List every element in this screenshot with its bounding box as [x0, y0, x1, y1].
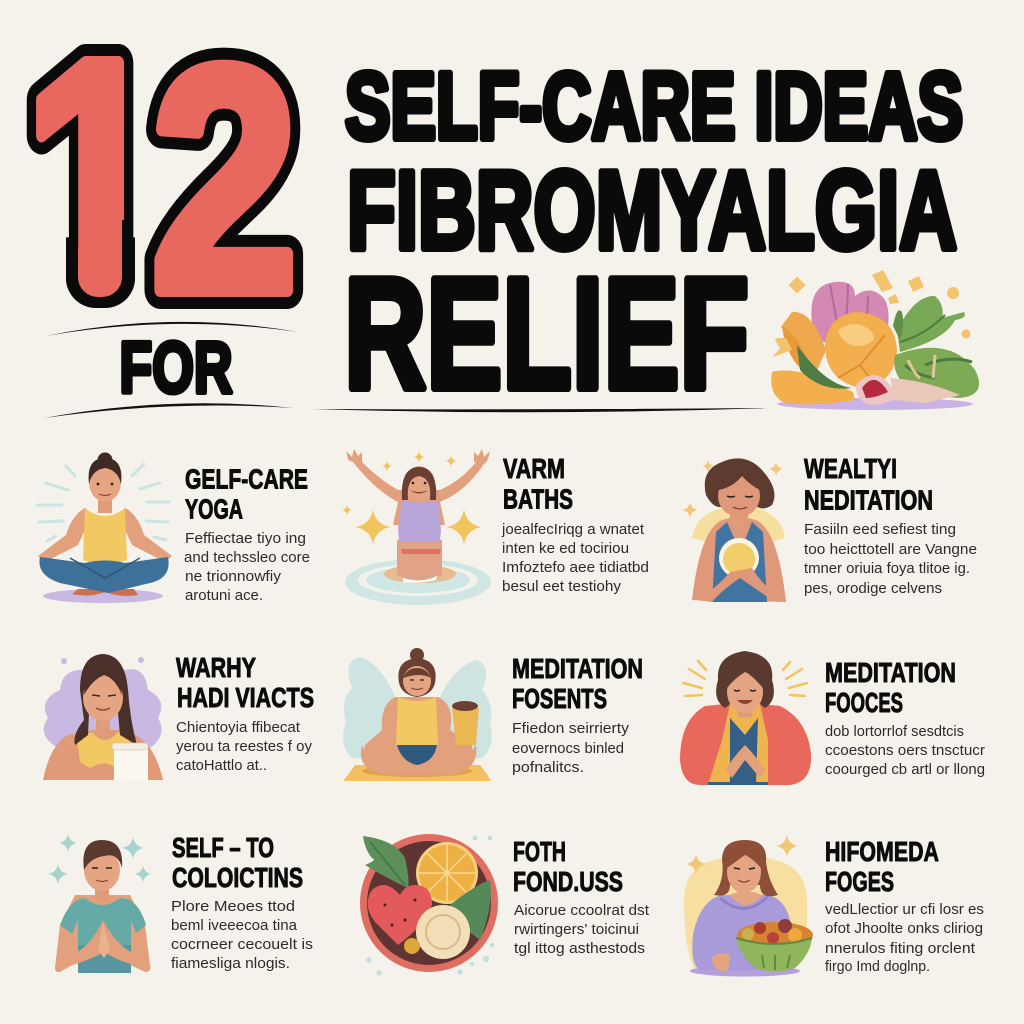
body text: Chientoyia ffibecat [176, 719, 301, 736]
heading: FOOCES [825, 687, 903, 718]
title: for: FOR [120, 328, 232, 408]
body text: Ffiedon seirrierty [512, 720, 630, 737]
big number 12: 1 [24, 0, 166, 360]
illustration: woman meditating with teal wings [343, 648, 492, 781]
panel: self-to coloictins [48, 832, 313, 973]
body text: ofot Jhoolte onks cliriog [825, 920, 983, 937]
illustration: woman with prayer hands [48, 834, 152, 973]
body text: ccoestons oers tnsctucr [825, 742, 985, 759]
illustration: food plate with heart and orange [360, 834, 498, 976]
body text: Imfoztefo aee tidiatbd [502, 559, 649, 576]
body text: Plore Meoes ttod [171, 898, 295, 915]
body text: joealfecIriqg a wnatet [501, 521, 645, 538]
panel: meditation fosents [343, 648, 643, 781]
big number 12 [26, 44, 304, 309]
body text: fiamesliga nlogis. [171, 955, 290, 972]
body text [176, 719, 312, 774]
heading [176, 652, 314, 713]
body text: Aicorue ccoolrat dst [514, 902, 650, 919]
heading [512, 653, 643, 714]
body text: rwirtingers' toicinui [514, 921, 639, 938]
body text: Fasiiln eed sefiest ting [804, 521, 956, 538]
illustration: woman holding a golden plate [682, 458, 786, 602]
body text [804, 521, 977, 597]
illustration: woman in bath water with sparkles [342, 449, 491, 605]
body text [184, 530, 310, 604]
body text: pes, orodige celvens [804, 580, 942, 597]
body text: Feffiectae tiyo ing [185, 530, 306, 547]
body text: tgl ittog asthestods [514, 940, 645, 957]
heading [825, 836, 939, 897]
heading [804, 453, 933, 516]
heading: COLOICTINS [172, 862, 303, 893]
panel: self-care yoga [37, 452, 310, 604]
body text: cocrneer cecouelt is [171, 936, 313, 953]
heading: WARHY [176, 652, 256, 683]
body text: pofnalitcs. [512, 759, 584, 776]
heading: BATHS [503, 484, 573, 514]
heading: FOND.USS [513, 866, 623, 897]
heading [513, 836, 623, 897]
body text [512, 720, 630, 776]
illustration: fruit and vegetable pile [771, 270, 979, 410]
heading: FOSENTS [512, 683, 607, 714]
body text: too heicttotell are Vangne [804, 541, 977, 558]
body text: dob lortorrlof sesdtcis [825, 723, 964, 740]
body text [825, 723, 985, 778]
heading: GELF-CARE [185, 464, 308, 494]
body text: nnerulos fiting orclent [825, 940, 976, 957]
heading: SELF – TO [172, 832, 274, 863]
heading: HIFOMEDA [825, 836, 939, 867]
body text: tmner oriuia foya tlitoe ig. [804, 560, 970, 577]
heading: MEDITATION [512, 653, 643, 684]
panel: warm baths [342, 449, 649, 605]
body text [171, 898, 313, 972]
heading: HADI VIACTS [177, 682, 314, 713]
body text: eovernocs binled [512, 740, 624, 757]
body text: besul eet testiohy [502, 578, 622, 595]
heading: MEDITATION [825, 657, 956, 688]
heading: WEALTYI [804, 453, 897, 484]
body text: beml iveeecoa tina [171, 917, 298, 934]
panel: foth fond.uss [360, 834, 650, 976]
heading [825, 657, 956, 718]
heading [503, 453, 573, 514]
body text: catoHattlo at.. [176, 757, 267, 774]
panel: meditation fooces [680, 651, 985, 785]
body text [514, 902, 650, 957]
big number 12: 1 [24, 0, 166, 360]
panel: wealthy meditation [682, 453, 977, 602]
big number 12: 2 [151, 0, 298, 358]
body text: inten ke ed tociriou [502, 540, 629, 557]
panel: warhy hadi viacts [43, 652, 314, 780]
heading: NEDITATION [804, 484, 933, 516]
panel: hifomeda foges [684, 835, 984, 976]
illustration: woman in lotus pose with rays [37, 452, 172, 603]
body text [825, 901, 984, 975]
heading: YOGA [185, 494, 243, 524]
body text: vedLlectior ur cfi losr es [825, 901, 984, 918]
body text: and techssleo core [184, 549, 310, 566]
body text: ne trionnowfiy [185, 568, 282, 585]
body text: firgo Imd doglnp. [825, 958, 930, 975]
body text: coourged cb artl or llong [825, 761, 985, 778]
illustration: woman in red cardigan with rays [680, 651, 811, 785]
body text: arotuni ace. [185, 587, 263, 604]
body text [501, 521, 649, 595]
body text: yerou ta reestes f oy [176, 738, 312, 755]
heading [172, 832, 303, 893]
heading: VARM [503, 453, 565, 484]
big number 12: 2 [151, 0, 298, 358]
illustration: woman with cup and purple cloud [43, 654, 163, 780]
heading [185, 464, 308, 524]
heading: FOGES [825, 866, 894, 897]
title: relief: RELIEF [344, 246, 749, 422]
illustration: woman in purple sweater with salad bowl [684, 835, 813, 976]
heading: FOTH [513, 836, 566, 867]
